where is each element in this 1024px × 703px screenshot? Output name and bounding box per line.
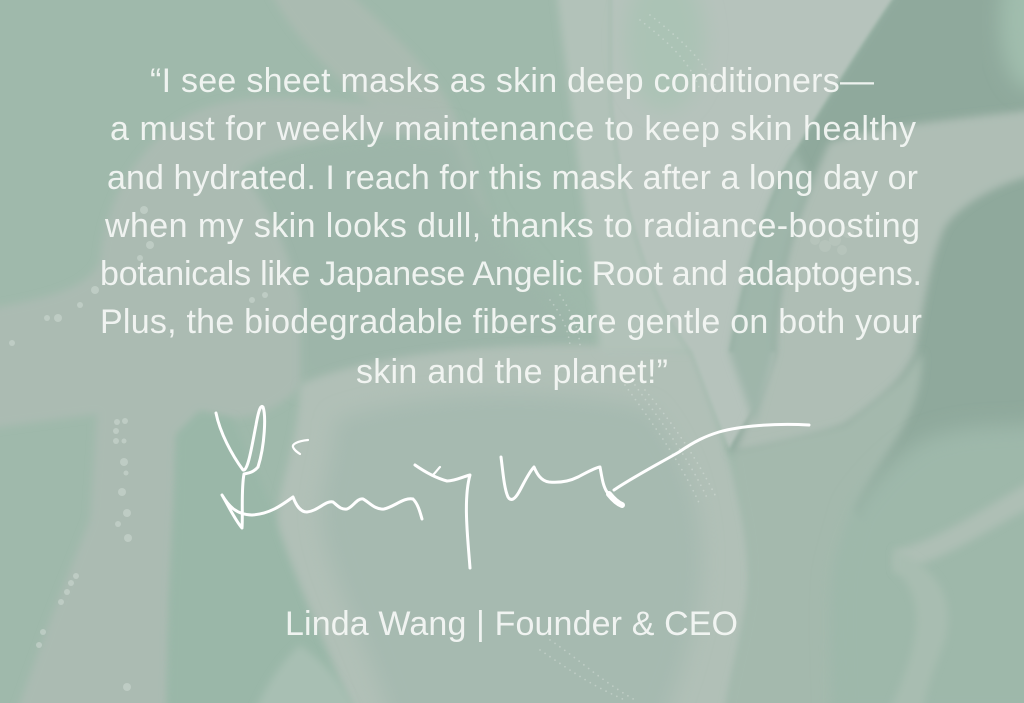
quote text: and hydrated. I reach for this mask after a long day or [107,159,918,197]
signature [216,406,809,568]
attribution: Linda Wang | Founder & CEO [285,605,738,643]
quote text: a must for weekly maintenance to keep skin healthy [110,110,916,148]
quote text [100,62,922,391]
water droplets [9,206,854,691]
quote text: botanicals like Japanese Angelic Root and adaptogens. [100,255,922,293]
quote text: Plus, the biodegradable fibers are gentle on both your [100,303,922,341]
quote text: “I see sheet masks as skin deep conditioners— [150,62,874,100]
fine speckles [540,15,715,700]
quote text: skin and the planet!” [356,353,668,391]
quote text: when my skin looks dull, thanks to radiance-boosting [104,207,920,245]
